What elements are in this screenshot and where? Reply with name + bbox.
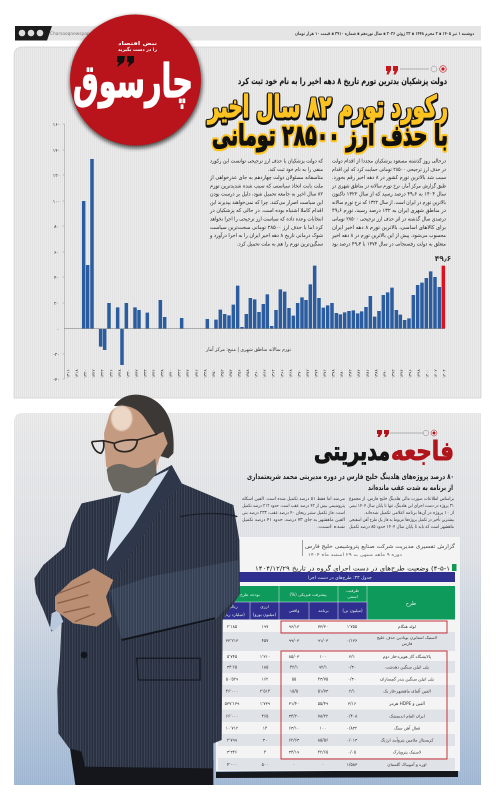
table rows: ۵۵/۴۹: [318, 701, 329, 706]
table title bar: جدول ۳۳: طرح‌های در دست اجرا: [308, 575, 372, 581]
article column right: برای کالاهای اساسی، بالاترین تورم ۸ دهه اخیر ایران: [332, 225, 446, 231]
table rows: ۷۳/۳۰: [318, 624, 328, 629]
document header: دوره ۹ ماهه منتهی به ۲۹ اسفند ماه ۱۴۰۴: [308, 553, 402, 558]
article column left: شوک درمانی تاریخ ۸ دهه اخیر ایران را به اجرا درآورد و: [209, 232, 323, 239]
year labels: ۱۳۴۴: [185, 369, 190, 378]
beard: [107, 458, 157, 493]
article column left: ۸۲ سال اخیر به جامعه تحمیل شود، دلیل بر درست بودن: [210, 192, 323, 198]
table rows: ۴۵۷: [262, 638, 269, 643]
table rows: ۹۶/۱۳: [289, 624, 300, 629]
article column left: که دولت پزشکیان با حذف ارز ترجیحی توانست این رکورد: [210, 158, 323, 164]
document: financial report table: [216, 537, 460, 778]
table rows: ۳/۱۶: [348, 701, 356, 706]
table rows: ۱۸۵: [262, 664, 269, 670]
year labels: ۱۳۹۴: [399, 369, 404, 378]
year labels: ۱۳۳۰: [125, 369, 130, 378]
table rows: لاستیک استایرن بوتادین حدف خلیج: [377, 635, 437, 640]
y axis: [53, 123, 64, 383]
table rows: ۴۳/۷۵: [318, 676, 329, 682]
table rows: ۹۱/۰۳: [318, 638, 329, 643]
table rows: ۳٬۳۴۶: [227, 750, 237, 754]
body text right: [349, 496, 454, 530]
year labels: ۱۳۳۶: [151, 369, 156, 378]
table rows: ۴٬۰۰۰: [227, 762, 237, 767]
year labels: ۱۳۲۴: [100, 369, 105, 378]
year labels: ۱۳۳۴: [142, 369, 148, 378]
table header: ریالی: [228, 604, 238, 609]
table rows: ۱٬۳۱۰: [260, 654, 270, 659]
article column right: درصدی سال گذشته در اثر حذف ارز ترجیحی ۲۸۵۰۰ تومانی: [332, 216, 447, 222]
table rows: ۲٬۷۹۹: [227, 738, 238, 742]
panel: management disaster: [14, 395, 481, 785]
article column right: محسوب می‌شود. پیش از این بالاترین تورم در ۸ دهه اخیر: [331, 233, 446, 239]
table row bands: [218, 632, 455, 770]
year labels: ۱۳۶۰: [254, 369, 259, 378]
y axis: -۲۰: [53, 352, 60, 358]
year labels: ۱۳۴۶: [194, 369, 199, 378]
table rows: ۰/۰۵: [348, 750, 357, 754]
headline line 2: با حذف ارز ۲۸۵۰۰ تومانی: [212, 119, 448, 152]
table rows: ۵۳۷٬۱۳۹: [225, 701, 240, 706]
table rows: ۴: [264, 750, 266, 754]
table rows: فارس: [402, 641, 412, 646]
title: مدیریتی: [314, 437, 390, 467]
table rows: ۱۹۷: [262, 624, 269, 629]
table rows: ۵٬۷۴۵: [227, 654, 238, 659]
article column right: درحالی روز گذشته مسعود پزشکیان مجددا از اقدام دولت: [332, 158, 447, 164]
lapel: [104, 465, 182, 578]
article column left: این سیاست اصرار می‌کنند. چرا که نمی‌خواهند بپذیرند این: [210, 200, 323, 206]
year labels: ۱۴۰۴: [442, 369, 446, 378]
issue date line: دوشنبه ۱ تیر ۱۴۰۵ ▪ ۲ محرم ۱۴۴۸ ▪ ۲۲ ژوئن ۲۰۲۶ ▪ سال نوزدهم ▪ شماره ۳۹۱۰ ▪ قیمت ۱۰ هزار تومان: [295, 31, 474, 37]
year labels: ۱۳۴۸: [202, 369, 207, 378]
year labels: ۱۳۶۸: [288, 369, 293, 378]
hands: [55, 568, 113, 627]
table rows: ۰/۱۳۶: [347, 638, 357, 643]
table rows: ۱۰۰: [320, 654, 326, 659]
table rows: ۸۵/۰۳: [289, 654, 300, 659]
portrait: man in suit: [34, 395, 240, 785]
table rows: فعال آهن سنگ: [394, 726, 420, 730]
document header: گزارش تفسیری مدیریت شرکت صنایع پتروشیمی خلیج فارس: [305, 543, 455, 550]
newspaper logo: [70, 14, 202, 148]
table rows: ۰/۴۰۸: [347, 714, 358, 718]
table rows: پلی اتیلن سنگین بندر گچساران: [380, 676, 435, 682]
table rows: ۲/۱: [349, 688, 355, 694]
y axis: ۸۰: [54, 225, 59, 230]
body text left: [242, 496, 346, 530]
year labels: ۱۳۵۴: [228, 369, 233, 378]
table rows: ۰/۰۱۳: [347, 738, 358, 742]
article column right: بالاترین تورم در ایران است. از سال ۱۳۲۲ که نرخ تورم سالانه: [332, 200, 446, 206]
year labels: ۱۳۱۶: [66, 369, 70, 378]
article column left: [209, 158, 324, 247]
table rows: ۲٬۱۸۵: [227, 624, 238, 629]
subtitle: [247, 472, 454, 492]
year labels: ۱۳۵۶: [236, 369, 242, 378]
document header: [302, 540, 455, 558]
table rows: ۱۰٬۷۱۲: [226, 726, 239, 730]
table header: ارزی: [260, 604, 269, 609]
table rows: ۸۵/۵۶: [318, 738, 328, 742]
table header: واقعی: [289, 608, 299, 613]
table rows: ۱۴: [263, 726, 267, 730]
table rows: ۵۰۰: [262, 762, 268, 767]
article column left: انتخابات وعده داده که سیاست ارز ترجیحی را اجرا نخواهد: [210, 216, 323, 222]
site name: Charsooqnewspaper: [50, 31, 94, 37]
article column left: متاسفانه مسئولان دولت چهاردهم به جای عذرخواهی از: [209, 175, 323, 181]
year labels: ۱۴۰۲: [433, 369, 438, 378]
year labels: ۱۳۶۴: [271, 369, 276, 378]
article column left: کرد اما با حذف ارز ۲۸۵۰۰ تومانی سخت‌ترین سیاست: [210, 225, 324, 231]
table rows: پالایشگاه گاز هویزه-فاز دوم: [383, 654, 432, 659]
table header: (میلیون یورو): [253, 612, 277, 617]
year labels: ۱۴۰۰: [425, 369, 430, 378]
body text left: است. فاز تکمیل ستبر ریحان ۴۰ درصد عقب، ۲۳۳ درصد بنی: [242, 510, 345, 516]
table rows: ۷۸/۲۲: [318, 714, 329, 718]
year labels: ۱۳۶۲: [262, 369, 267, 378]
year labels: ۱۳۲۰: [83, 369, 88, 378]
year labels: ۱۳۸۸: [373, 369, 378, 378]
top info bar: [15, 26, 481, 40]
bars: [84, 159, 443, 365]
article column right: در مناطق شهری ایران به ۱۳۲ درصد رسید، تورم ۴۹٫۶: [332, 208, 447, 214]
table rows: لوله هنگام: [398, 624, 416, 629]
year labels: ۱۳۳۸: [160, 369, 165, 378]
table rows: ۴۶٬۰۰۰: [226, 688, 238, 694]
table rows: ۰/۸۳۲: [347, 726, 358, 730]
y axis: -۴۰: [53, 378, 60, 383]
table rows: ۹۲/۱: [319, 664, 327, 670]
table rows: پلی اتیلن سنگین دهدشت: [385, 664, 430, 670]
year labels: ۱۳۷۶: [322, 369, 327, 378]
table header: [218, 586, 455, 620]
table rows: ۳۴/۲۰: [289, 714, 299, 718]
title: فاجعه: [391, 437, 454, 467]
table header: (میلیارد ریال): [221, 612, 245, 617]
table rows: ۴۲/۱: [290, 664, 298, 670]
article column left: سنگین‌ترین تورم را هم به ملت تحمیل کرد.: [237, 240, 323, 247]
y axis: ۱۰۰: [53, 200, 60, 205]
glasses: [92, 434, 157, 453]
table header: طرح: [406, 601, 416, 607]
table header: برنامه: [318, 608, 329, 613]
subtitle: از برنامه به شدت عقب مانده‌اند: [368, 483, 453, 492]
year labels: ۱۳۱۸: [74, 369, 79, 378]
year labels: ۱۳۷۰: [296, 369, 301, 378]
article column right: [331, 158, 447, 247]
table rows: ۱۶۲: [262, 676, 269, 682]
year labels: ۱۳۹۲: [390, 369, 395, 378]
table header: اسمی: [347, 594, 358, 599]
table header: ظرفیت: [346, 588, 360, 593]
year labels: ۱۳۹۰: [382, 369, 387, 378]
year labels: ۱۳۴۰: [168, 369, 173, 378]
y axis: ۱۲۰: [53, 173, 60, 179]
year labels: [66, 369, 446, 378]
year labels: ۱۳۵۲: [219, 369, 224, 378]
article column right: سبب شد بالاترین تورم کشور در ۸ دهه اخیر رقم بخورد.: [332, 175, 446, 181]
table rows: [225, 624, 437, 767]
table rows: ۶۶٬۰۰۰: [226, 714, 238, 718]
table rows: ۶۲/۶۳: [289, 738, 300, 742]
hair: [114, 395, 174, 458]
table rows: ۵۰٬۵۲۹: [226, 676, 239, 682]
logo tagline: [118, 41, 157, 53]
logo quote mark: [117, 56, 134, 67]
body text left: پتروشیمی بیش از ۴۲ درصد عقب است. حدود ۲۱۲ درصد تکمیل: [242, 503, 346, 509]
year labels: ۱۳۴۲: [177, 369, 182, 378]
table rows: ۳۴/۱۹: [289, 750, 300, 754]
body text right: بیشترین تأخیر در تکمیل پروژه‌ها مربوط به فاز یک طرح آهن اسفنجی: [349, 516, 454, 523]
article column left: ملت بابت اتخاذ سیاستی که سبب شده شدیدترین تورم: [210, 183, 323, 189]
table rows: اوره و آمونیاک گلستان: [387, 762, 427, 767]
table rows: لاستیک پتروپارک: [393, 750, 421, 754]
trousers: [69, 743, 213, 785]
article column right: متعلق به دولت رفسنجانی در سال ۱۳۷۴ با ۴۹٫۳ درصد بود: [332, 241, 446, 247]
y axis: ۱۴۰: [53, 149, 60, 154]
year labels: ۱۳۷۲: [305, 369, 310, 378]
body text right: براساس اطلاعات صورت مالی هلدینگ خلیج فارس، از مجموع: [349, 496, 454, 502]
table rows: ۳۴٬۶۵: [227, 664, 238, 670]
year labels: ۱۳۲۲: [91, 369, 96, 378]
year labels: ۱۳۸۶: [365, 369, 370, 378]
table rows: ۰/۳۰: [348, 676, 356, 682]
body text left: شده است.: [317, 525, 345, 530]
table rows: ۴۲/۶۵: [318, 750, 329, 754]
section heading: ۴-۵-۱) وضعیت طرح‌های در دست اجرای گروه در تاریخ ۱۴۰۴/۱۲/۲۹: [255, 564, 450, 572]
article column left: منفی را به نام خود ثبت کند.: [268, 167, 323, 173]
table rows: ۰: [322, 762, 324, 767]
table title bar: [218, 572, 455, 582]
year labels: ۱۳۸۲: [348, 369, 353, 378]
year labels: ۱۳۷۴: [314, 369, 318, 378]
red highlight boxes: [281, 621, 447, 759]
table rows: ۳۱/۴۰: [289, 701, 299, 706]
table rows: ۰: [293, 762, 295, 767]
article column right: سال ۱۴۰۴ به ۴۹٫۶ درصد رسید که از سال ۱۳۲۲ تاکنون: [332, 192, 446, 198]
body text right: از ۱۰ پروژه در آن‌ها برنامه اعلامی تکمیل شده‌اند.: [364, 510, 454, 516]
year labels: ۱۳۲۶: [108, 369, 113, 378]
table rows: ۵۵: [292, 676, 297, 682]
article column left: اقدام کاملا اشتباه بوده است. در حالی که پزشکیان در: [209, 208, 323, 214]
y axis: ۴۰: [54, 276, 59, 281]
social icons strip: [15, 26, 52, 40]
body text right: ۳۱ پروژه در دست اجرای این هلدینگ، تنها تا پایان سال ۱۴۰۴ نیمی: [349, 503, 454, 509]
table header: (میلیون تن): [342, 608, 363, 613]
table rows: ۶۳/۱۰: [289, 726, 299, 730]
bar chart: annual inflation: [53, 123, 451, 383]
table rows: ۹۹/۰۳: [289, 638, 300, 643]
year labels: ۱۳۳۲: [134, 369, 139, 378]
year labels: ۱۳۸۴: [356, 369, 361, 378]
table rows: ۳۰: [263, 738, 267, 742]
logo tagline: را در دست بگیرید: [118, 46, 157, 53]
year labels: ۱۳۵۰: [211, 369, 216, 378]
table rows: ۱۰۰: [320, 726, 326, 730]
table rows: ۴۶۵: [262, 714, 269, 718]
face: [104, 406, 168, 482]
table rows: ۱۵/۵: [290, 688, 299, 694]
table rows: ۳۳٬۲۱۳: [226, 638, 239, 643]
y axis: ۶۰: [54, 251, 59, 256]
year labels: ۱۳۸۰: [339, 369, 344, 378]
article column right: طبق گزارش مرکز آمار، نرخ تورم سالانه در مناطق شهری در: [331, 182, 446, 189]
kicker marks: [386, 66, 446, 74]
jacket button: [81, 652, 87, 658]
shirt: [106, 468, 172, 565]
shirt cuff: [50, 610, 63, 632]
jacket pocket: [137, 658, 200, 680]
year labels: ۱۳۶۶: [279, 369, 284, 378]
article column right: در حذف ارز ترجیحی ۲۸۵۰۰ تومانی حمایت کرد که این اقدام: [332, 167, 447, 173]
year labels: ۱۳۵۸: [245, 369, 250, 378]
table rows: ۵۱/۷۳: [318, 688, 329, 694]
subheadline: دولت پزشکیان بدترین تورم تاریخ ۸ دهه اخیر را به نام خود ثبت کرد: [238, 77, 447, 87]
table rows: ایران الفام اندیمشک: [389, 714, 425, 718]
kicker marks: [377, 430, 437, 437]
jacket: [34, 465, 240, 768]
table header: بودجه طرح: [240, 592, 260, 597]
y axis: ۱۶۰: [53, 123, 60, 128]
table rows: ۱٬۷۳۹: [260, 701, 271, 706]
forehead highlight: [111, 406, 132, 431]
y axis: ۰: [57, 328, 59, 332]
table rows: ۲٬۵۱۴: [260, 688, 270, 694]
y axis: ۲۰: [54, 301, 59, 307]
logo wordmark: چارسوق: [73, 54, 193, 109]
table rows: ۳/۱: [349, 654, 355, 659]
headline line 2: با حذف ارز ۲۸۵۰۰ تومانی: [212, 119, 448, 152]
table header: پیشرفت فیزیکی (%): [289, 592, 327, 597]
year labels: ۱۳۲۸: [117, 369, 122, 378]
year labels: ۱۳۹۶: [408, 369, 412, 378]
last value label: ۴۹٫۶: [435, 254, 451, 263]
table rows: ۰/۳۰: [348, 664, 356, 670]
table rows: کریستال ملامین پتروآیند ارژنگ: [381, 738, 433, 742]
body text right: ماهشهر است که باید تا پایان سال ۱۴۰۴ حدود ۸۵ درصد تکمیل: [349, 524, 454, 530]
year labels: ۱۳۷۸: [331, 369, 336, 378]
table rows: آلفین و HDPE هرمز: [388, 701, 426, 706]
table rows: الفین آلفای ماهشهر-فاز یک: [383, 688, 431, 694]
logo tagline: نبض اقتصاد: [118, 41, 157, 47]
year labels: ۱۳۹۸: [416, 369, 421, 378]
panel: inflation record: [14, 47, 481, 398]
table rows: ۱/۵۸۳: [347, 762, 358, 767]
chart source: تورم سالانه مناطق شهری | منبع: مرکز آمار: [205, 346, 292, 353]
body text left: الفین ماهشهر به جای ۷۳ درصد، حدود ۴۱ درصد تکمیل: [242, 517, 345, 523]
body text left: می‌شد اما فقط ۵۱ درصد تکمیل شده است. الفین اسکله: [242, 496, 346, 502]
table rows: ۱٬۷۵۵: [347, 624, 358, 629]
